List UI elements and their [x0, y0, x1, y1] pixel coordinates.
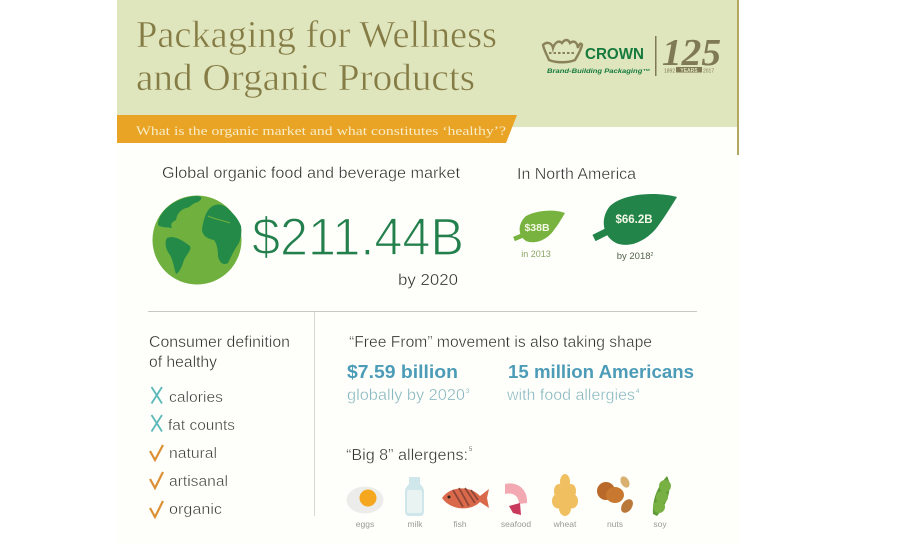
list: healthy criteria [150, 387, 235, 518]
item: organic: organic [169, 501, 223, 518]
title: Packaging for Wellness [136, 14, 497, 56]
subtitle banner [117, 115, 517, 143]
title [136, 14, 497, 99]
allergen: eggs [346, 486, 384, 529]
stat: $7.59 billion: $7.59 billion [347, 362, 458, 382]
stat: $7.59 billion [347, 362, 470, 404]
heading: consumer definition [149, 334, 290, 371]
icon: globe [152, 196, 242, 284]
stat: 15 million Americans [506, 362, 694, 404]
leaf: $66.2B [594, 194, 677, 245]
leaf: $38B [514, 211, 565, 242]
allergen: milk [405, 477, 424, 529]
item: calories: calories [169, 389, 223, 406]
heading: north america: In North America [517, 166, 636, 183]
logo: Crown [543, 32, 721, 76]
title: and Organic Products [136, 57, 475, 99]
item: natural: natural [169, 445, 217, 462]
leaf: $38B: $38B [524, 222, 550, 234]
header panel [117, 0, 739, 155]
allergen: fish [442, 488, 489, 529]
allergen: wheat: wheat [553, 519, 577, 529]
crown tagline: Brand-Building Packaging™ [547, 68, 650, 75]
125 years mark: 125 [662, 32, 721, 74]
icon: crown [543, 40, 582, 62]
by 2020: by 2020 [398, 272, 458, 289]
years badge: 1892 [664, 68, 675, 74]
item: artisanal: artisanal [169, 473, 228, 490]
heading: big 8 allergens: 5 [469, 447, 473, 453]
stat: 15 million Americans: 15 million Americans [508, 362, 694, 382]
allergen: nuts [597, 475, 635, 529]
allergen: wheat [552, 474, 578, 529]
allergen: soy: soy [653, 519, 667, 529]
heading: consumer definition: Consumer definition [149, 334, 290, 351]
label: by 2018: 2 [651, 252, 654, 258]
allergen: eggs: eggs [356, 519, 374, 529]
label: in 2013: in 2013 [521, 249, 551, 259]
item: fat counts: fat counts [168, 417, 235, 434]
leaf: $66.2B: $66.2B [615, 214, 653, 226]
years badge [664, 67, 714, 74]
allergen: seafood: seafood [501, 519, 531, 529]
stat: 15 million Americans: with food allergies [506, 387, 635, 404]
subtitle banner: What is the organic market and what constitutes ‘healthy’? [136, 123, 506, 138]
years badge: YEARS [680, 68, 698, 74]
stat: $7.59 billion: 3 [466, 389, 470, 395]
heading: free from: “Free From” movement is also taking shape [349, 334, 652, 351]
heading: global market: Global organic food and beverage market [162, 165, 461, 182]
heading: big 8 allergens: “Big 8” allergens: [346, 447, 468, 464]
allergen: nuts: nuts [607, 519, 623, 529]
allergen: soy [653, 476, 671, 529]
big number: $211.44B: $211.44B [252, 208, 464, 267]
stat: $7.59 billion: globally by 2020 [347, 387, 465, 404]
allergen: fish: fish [453, 519, 467, 529]
heading: consumer definition: of healthy [149, 354, 217, 371]
crown wordmark: CROWN [585, 46, 644, 63]
label: by 2018: by 2018 [617, 251, 651, 262]
stat: 15 million Americans: 4 [636, 389, 640, 395]
allergen: seafood [501, 483, 531, 529]
years badge: 2017 [703, 68, 714, 74]
allergen: milk: milk [407, 519, 423, 529]
